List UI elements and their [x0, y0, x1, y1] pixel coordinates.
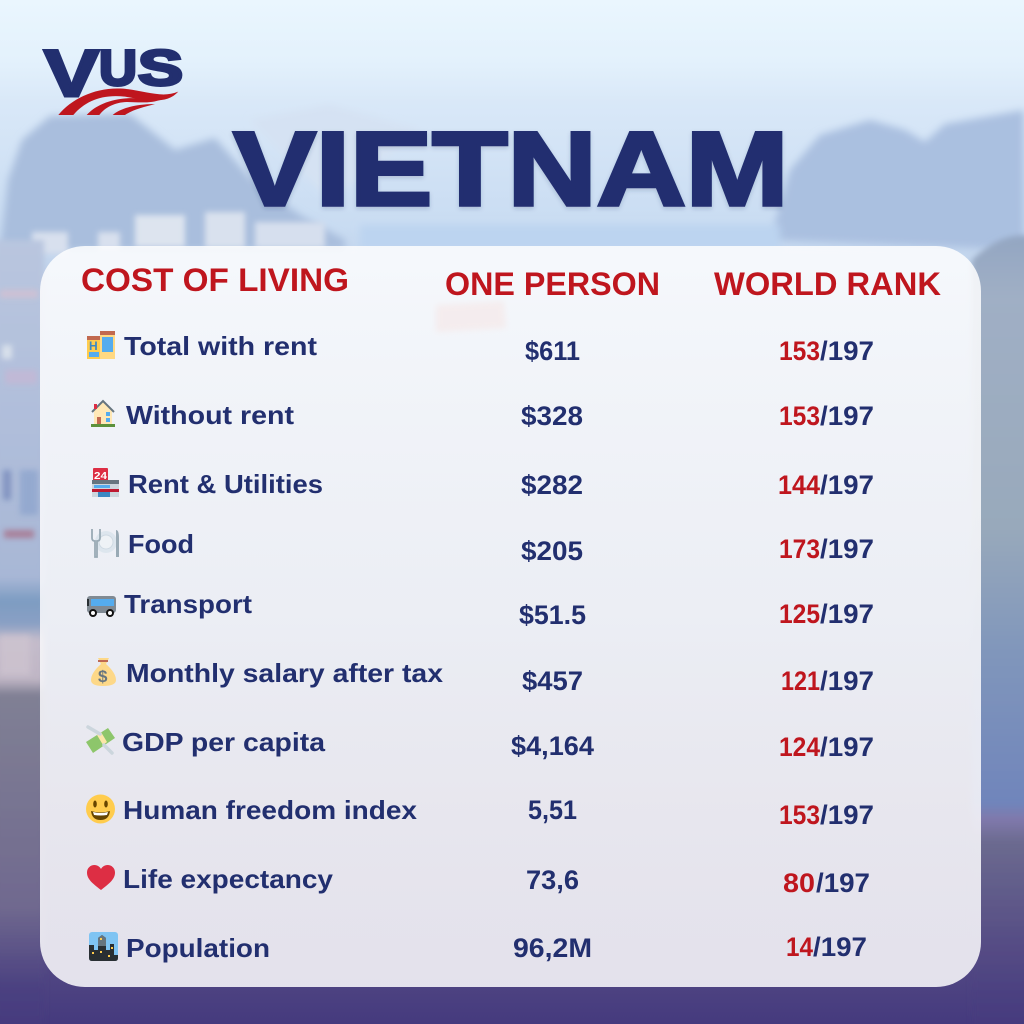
- row label: without rent: Without rent: [126, 400, 294, 430]
- value: $51.5: $51.5: [519, 600, 586, 630]
- logo: VUS: S: [138, 40, 183, 96]
- row label: transport: Transport: [124, 589, 252, 619]
- value: $611: $611: [525, 336, 580, 366]
- rank: 144/197: /197: [820, 470, 874, 500]
- value: $457: $457: [522, 666, 583, 696]
- rank: 125/197: /197: [820, 599, 874, 629]
- logo: VUS: V: [44, 36, 99, 110]
- icon: money with wings: [86, 727, 115, 753]
- row label: gdp per capita: GDP per capita: [122, 727, 326, 757]
- rank: 121/197: /197: [820, 666, 874, 696]
- rank: 125/197: 125: [779, 599, 820, 629]
- value: 96,2M: 96,2M: [513, 933, 592, 963]
- icon: heart: [87, 865, 115, 890]
- rank: 153/197: 153: [779, 336, 820, 366]
- value: 73,6: 73,6: [526, 865, 579, 895]
- icon: hotel: [87, 331, 115, 359]
- column heading: world rank: WORLD RANK: [714, 266, 941, 302]
- value: 5,51: 5,51: [528, 795, 577, 825]
- icon: convenience store: [92, 468, 119, 497]
- icon: convenience store: 24: [94, 471, 108, 482]
- icon: hotel: H: [89, 339, 98, 353]
- value: $328: $328: [521, 401, 583, 431]
- rank: 124/197: 124: [779, 732, 820, 762]
- icon: plate and cutlery: [92, 529, 119, 557]
- faint flag in background photo: [436, 301, 506, 332]
- rank: 121/197: [781, 666, 874, 696]
- row label: monthly salary after tax: Monthly salary after tax: [126, 658, 444, 688]
- column heading: cost of living: COST OF LIVING: [81, 262, 349, 298]
- rank: 124/197: [779, 732, 874, 762]
- rank: 80/197: [783, 868, 870, 898]
- row label: population: Population: [126, 933, 270, 963]
- logo: VUS: U: [99, 40, 137, 96]
- rank: 173/197: /197: [820, 534, 874, 564]
- value: $282: $282: [521, 470, 583, 500]
- logo: VUS: [44, 36, 183, 115]
- rank: 14/197: [786, 932, 867, 962]
- rank: 80/197: /197: [816, 868, 870, 898]
- row label: human freedom index: Human freedom index: [123, 795, 418, 825]
- icon: city at night: [89, 932, 118, 961]
- rank: 124/197: /197: [820, 732, 874, 762]
- rank: 153/197: [779, 800, 874, 830]
- value: $4,164: $4,164: [511, 731, 594, 761]
- rank: 153/197: [779, 336, 874, 366]
- icon: money bag: [91, 658, 116, 686]
- rank: 153/197: 153: [779, 800, 820, 830]
- rank: 144/197: [778, 470, 874, 500]
- rank: 80/197: 80: [783, 868, 815, 898]
- rank: 153/197: /197: [820, 401, 874, 431]
- rank: 14/197: 14: [786, 932, 813, 962]
- rank: 144/197: 144: [778, 470, 820, 500]
- rank: 14/197: /197: [813, 932, 867, 962]
- row label: food: Food: [128, 529, 194, 559]
- icon: money bag: $: [98, 667, 108, 686]
- row label: total with rent: Total with rent: [124, 331, 317, 361]
- rank: 121/197: 121: [781, 666, 820, 696]
- rank: 153/197: /197: [820, 336, 874, 366]
- rank: 173/197: 173: [779, 534, 820, 564]
- row label: rent and utilities: Rent & Utilities: [128, 469, 323, 499]
- panel: cost of living table: [40, 246, 981, 987]
- value: $205: $205: [521, 536, 583, 566]
- title: VIETNAM: [234, 111, 788, 228]
- rank: 125/197: [779, 599, 874, 629]
- rank: 153/197: 153: [779, 401, 820, 431]
- rank: 153/197: [779, 401, 874, 431]
- icon: bus: [87, 596, 116, 616]
- rank: 153/197: /197: [820, 800, 874, 830]
- rank: 173/197: [779, 534, 874, 564]
- icon: house: [91, 401, 115, 427]
- icon: smiling face: [86, 794, 115, 824]
- row label: life expectancy: Life expectancy: [123, 864, 334, 894]
- column heading: one person: ONE PERSON: [445, 266, 660, 302]
